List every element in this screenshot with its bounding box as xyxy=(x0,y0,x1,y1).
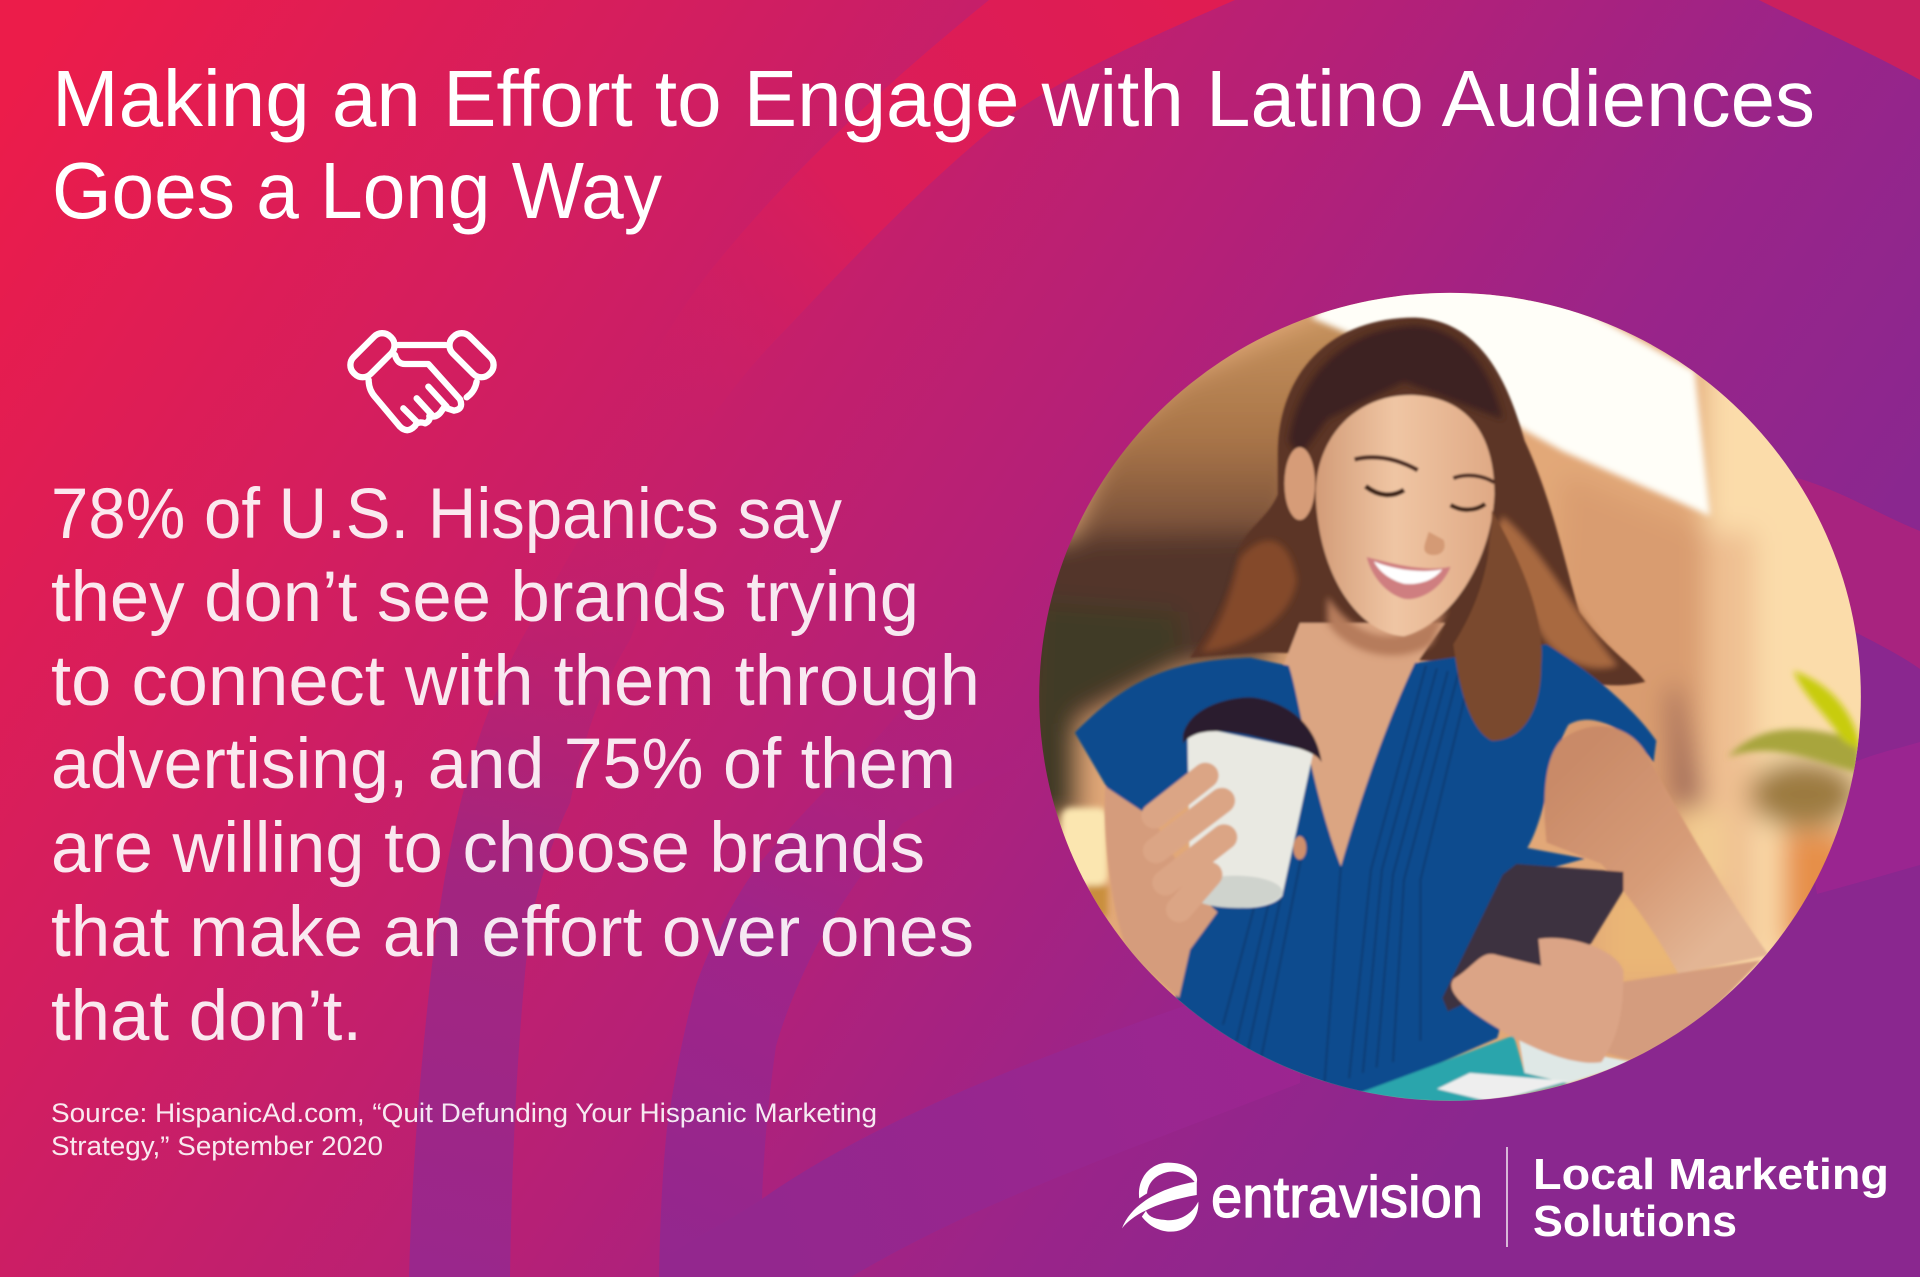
body statement: to connect with them through xyxy=(51,642,980,721)
fingertip behind cup xyxy=(1293,836,1306,860)
logo wordmark: entravision xyxy=(1211,1165,1483,1230)
title xyxy=(52,54,1815,235)
hair highlights xyxy=(1201,326,1618,668)
photo backdrop xyxy=(1039,292,1861,1101)
hand on phone xyxy=(1451,938,1623,1063)
title: Goes a Long Way xyxy=(52,146,662,235)
background swooshes xyxy=(409,0,1920,1277)
photo overhead light panel xyxy=(1311,269,1710,516)
source note: Source: HispanicAd.com, “Quit Defunding Your Hispanic Marketing xyxy=(51,1098,877,1128)
coffee cup xyxy=(1183,697,1322,908)
face xyxy=(1316,395,1494,636)
hair back xyxy=(1190,317,1645,685)
facial features xyxy=(1355,457,1494,599)
photo details: lamp and plant xyxy=(1061,671,1862,917)
body statement xyxy=(51,475,980,1056)
logo mark xyxy=(1122,1163,1198,1232)
logo divider xyxy=(1506,1147,1508,1247)
front hair lock xyxy=(1453,510,1542,741)
source note: Strategy,” September 2020 xyxy=(51,1131,383,1161)
left hand and arm xyxy=(1105,786,1217,998)
body statement: that make an effort over ones xyxy=(51,893,974,972)
icon: handshake xyxy=(346,328,498,430)
smartphone xyxy=(1442,864,1623,1011)
body statement: they don’t see brands trying xyxy=(51,558,919,637)
neck and chest xyxy=(1283,623,1445,867)
logo: entravision xyxy=(1122,1163,1483,1232)
fingers on cup xyxy=(1154,776,1224,909)
logo tagline: Local Marketing xyxy=(1533,1150,1889,1199)
logo tagline xyxy=(1533,1150,1889,1246)
right arm xyxy=(1544,726,1769,974)
source note xyxy=(51,1098,877,1161)
table and notebook xyxy=(1360,1035,1630,1101)
forearm xyxy=(1601,960,1760,1059)
neck shadow xyxy=(1327,596,1448,655)
blue blouse xyxy=(1075,644,1656,1105)
body statement: that don’t. xyxy=(51,977,362,1056)
body statement: advertising, and 75% of them xyxy=(51,725,956,804)
title: Making an Effort to Engage with Latino Audiences xyxy=(52,54,1815,143)
photo: woman with coffee and phone xyxy=(1039,292,1861,1101)
blouse pleats xyxy=(1223,666,1470,1084)
body statement: are willing to choose brands xyxy=(51,809,925,888)
ear xyxy=(1284,447,1315,520)
woman figure xyxy=(1075,317,1769,1110)
logo tagline: Solutions xyxy=(1533,1197,1737,1246)
body statement: 78% of U.S. Hispanics say xyxy=(51,475,842,554)
